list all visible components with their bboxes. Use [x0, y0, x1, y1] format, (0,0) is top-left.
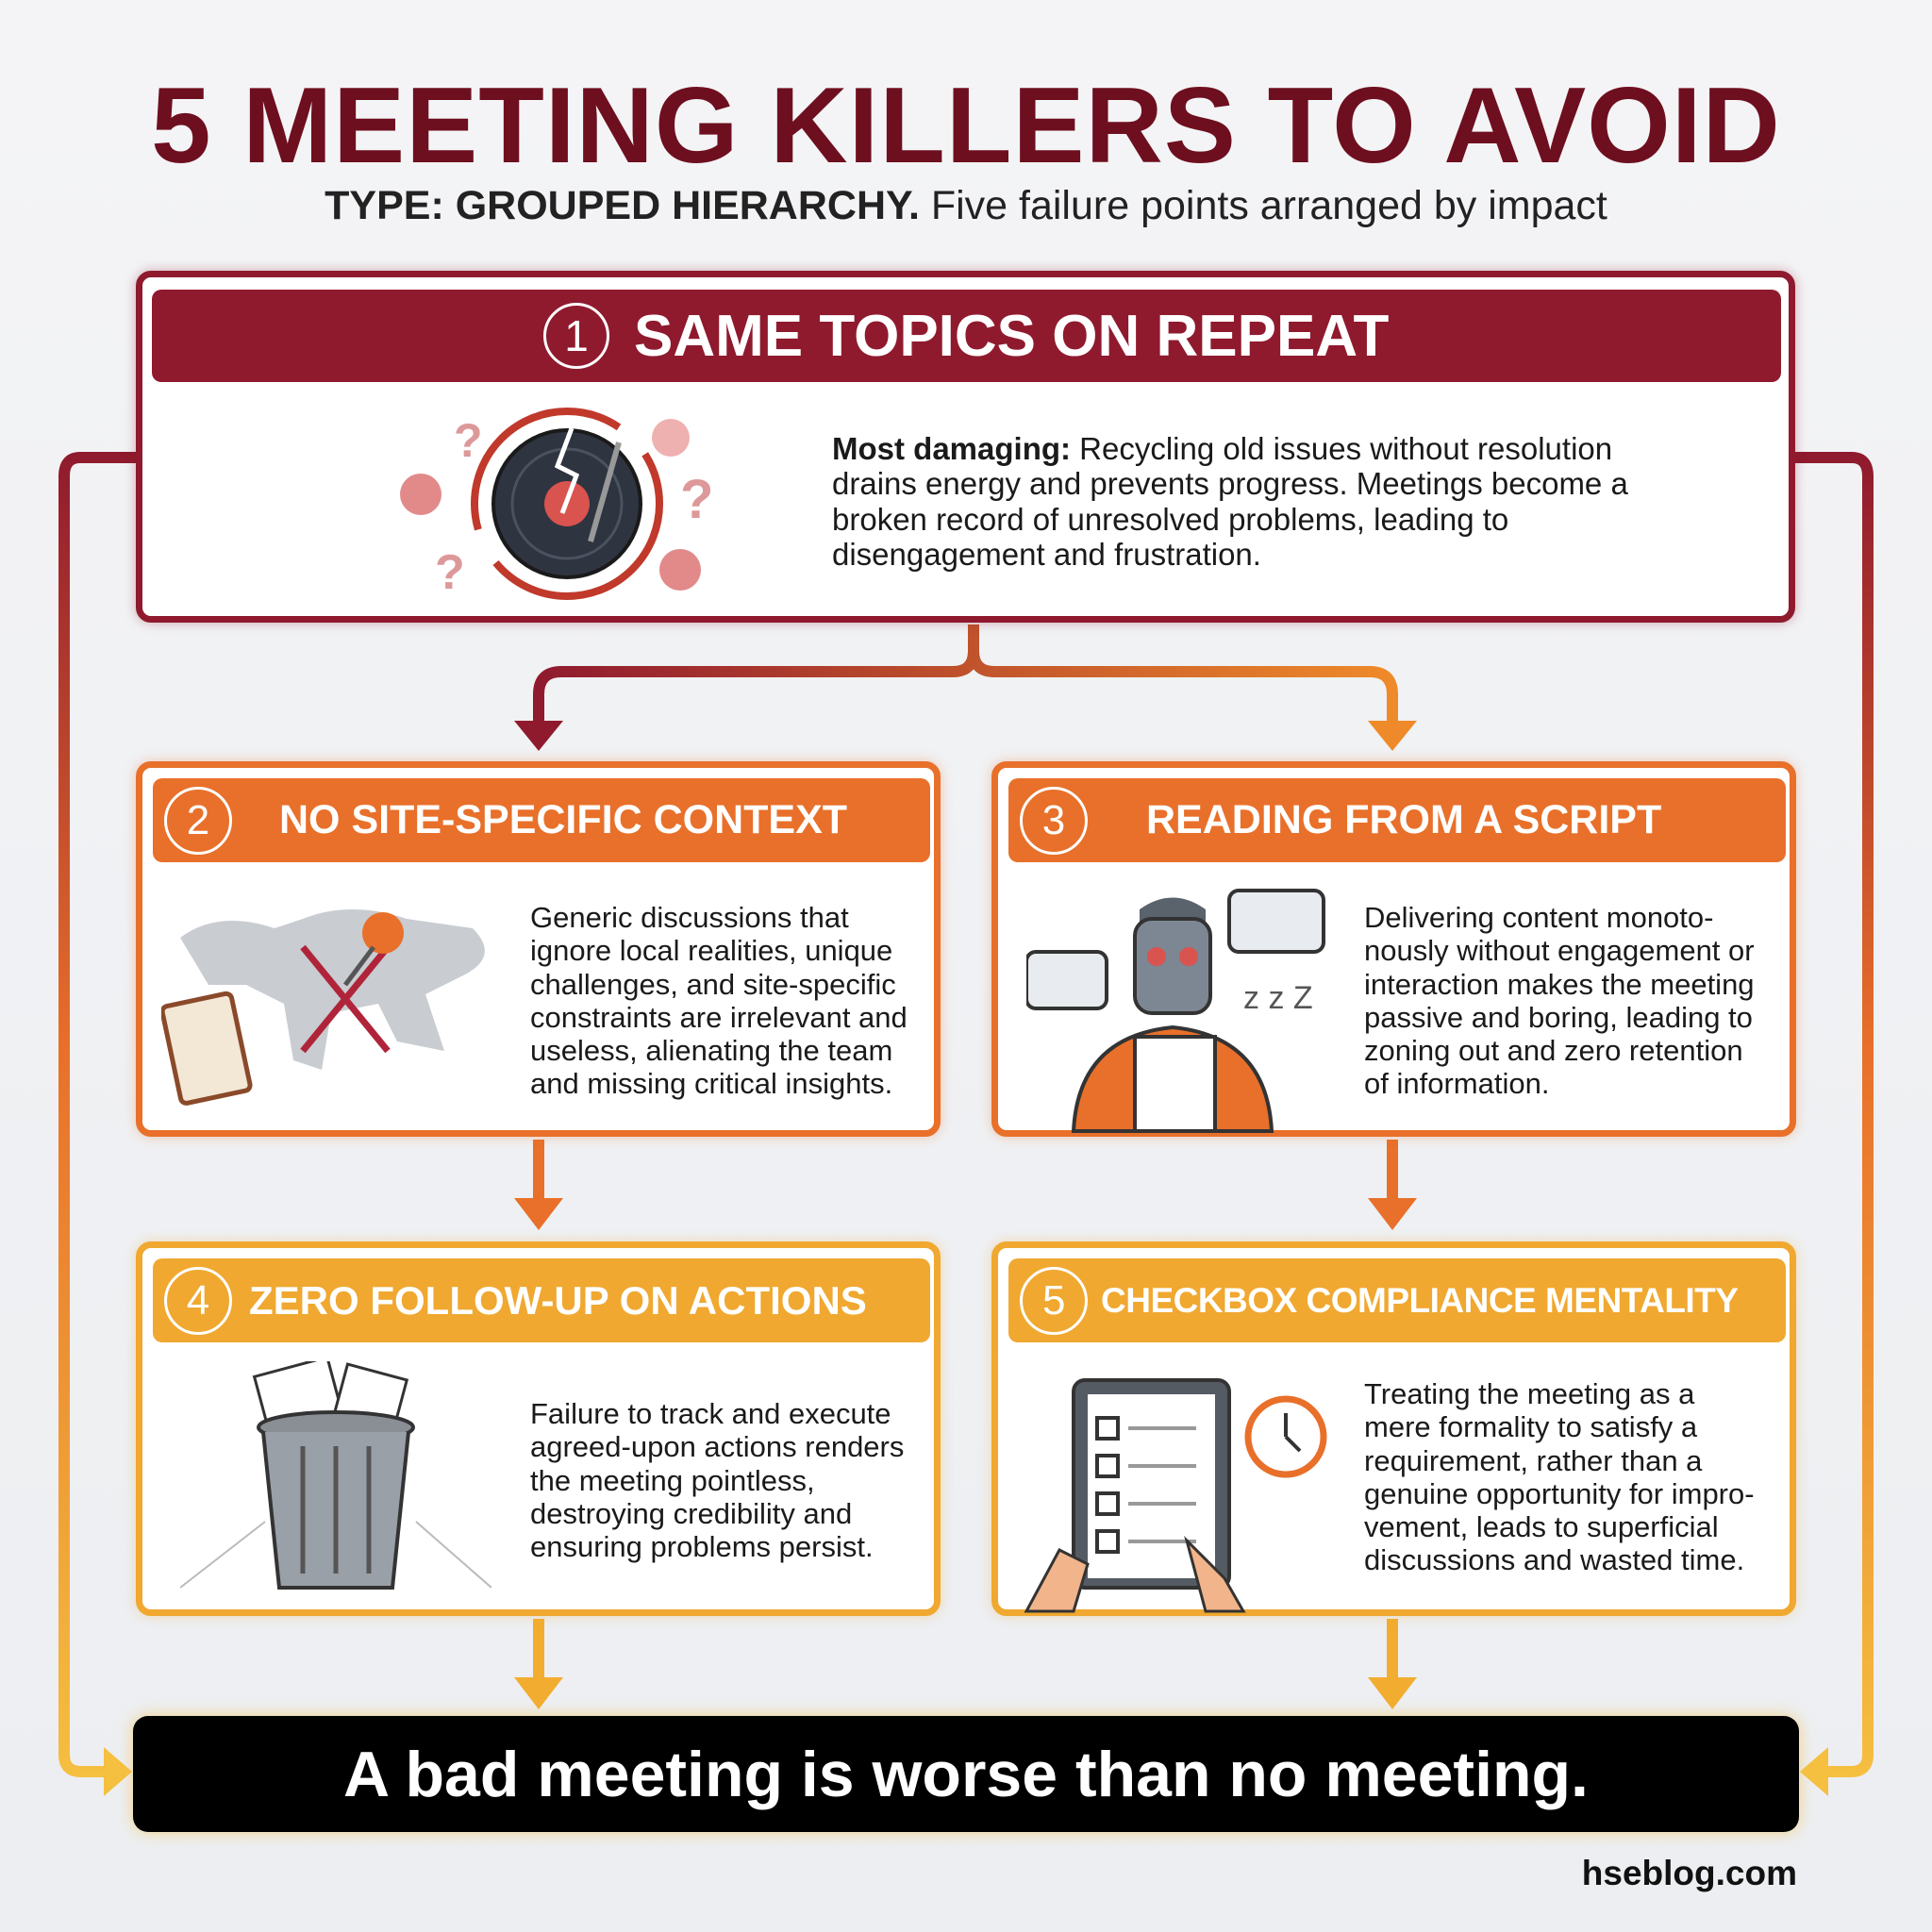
title: 5 MEETING KILLERS TO AVOID — [151, 66, 1781, 186]
icon: map with crossed pin — [161, 909, 485, 1106]
icon: robot reading script: z z Z — [1243, 980, 1313, 1016]
header 2 — [153, 778, 930, 862]
icon: robot reading script — [1026, 889, 1325, 1133]
header 5: 5 — [1042, 1277, 1065, 1323]
header 4 — [153, 1258, 930, 1342]
header 1: 1 — [564, 311, 589, 360]
icon: broken record: ? — [435, 545, 465, 600]
icon: broken record — [400, 408, 713, 600]
header 5: CHECKBOX COMPLIANCE MENTALITY — [1101, 1281, 1738, 1319]
header 1 — [152, 290, 1781, 382]
text 5: Treating the meeting as a mere formality to satisfy a requirement, rather than a genuine opportunity for impro-vement, leads to superficial discussions and wasted time. — [1364, 1377, 1755, 1576]
bottom callout — [133, 1716, 1799, 1832]
header 2: NO SITE-SPECIFIC CONTEXT — [279, 797, 847, 842]
header 3 — [1008, 778, 1786, 862]
panel 5: checkbox compliance — [991, 1241, 1796, 1616]
icon: trash can with action items — [180, 1361, 491, 1590]
text 3: Delivering content monoto-nously without engagement or interaction makes the meeting passive and boring, leading to zoning out and zero retention of information. — [1364, 901, 1755, 1100]
panel 4: zero follow-up — [136, 1241, 941, 1616]
source credit: hseblog.com — [1582, 1854, 1797, 1892]
subtitle: TYPE: GROUPED HIERARCHY. Five failure points arranged by impact — [325, 183, 1607, 228]
panel 2: no site-specific context — [136, 761, 941, 1137]
icon: broken record: ? — [680, 469, 713, 530]
header 5 — [1008, 1258, 1786, 1342]
panel 1: same topics on repeat — [136, 271, 1795, 623]
text 2: Generic discussions that ignore local realities, unique challenges, and site-specific constraints are irrelevant and useless, alienating the team and missing critical insights. — [530, 901, 908, 1100]
bottom callout: A bad meeting is worse than no meeting. — [343, 1738, 1589, 1809]
header 3: 3 — [1042, 796, 1065, 843]
header 2: 2 — [187, 796, 209, 843]
header 3: READING FROM A SCRIPT — [1146, 797, 1661, 842]
text 1: Most damaging: Recycling old issues without resolution drains energy and prevents progress. Meetings become a broken record of unresolved problems, leading to disengagement and frustration. — [832, 431, 1628, 572]
text 4: Failure to track and execute agreed-upon actions renders the meeting pointless, destroying credibility and ensuring problems persist. — [530, 1397, 904, 1563]
header 4: 4 — [187, 1277, 209, 1323]
panel 3: reading from a script — [991, 761, 1796, 1137]
header 1: SAME TOPICS ON REPEAT — [634, 304, 1389, 368]
icon: broken record: ? — [454, 414, 483, 467]
icon: checklist and stopwatch — [1024, 1378, 1326, 1613]
header 4: ZERO FOLLOW-UP ON ACTIONS — [249, 1277, 867, 1323]
